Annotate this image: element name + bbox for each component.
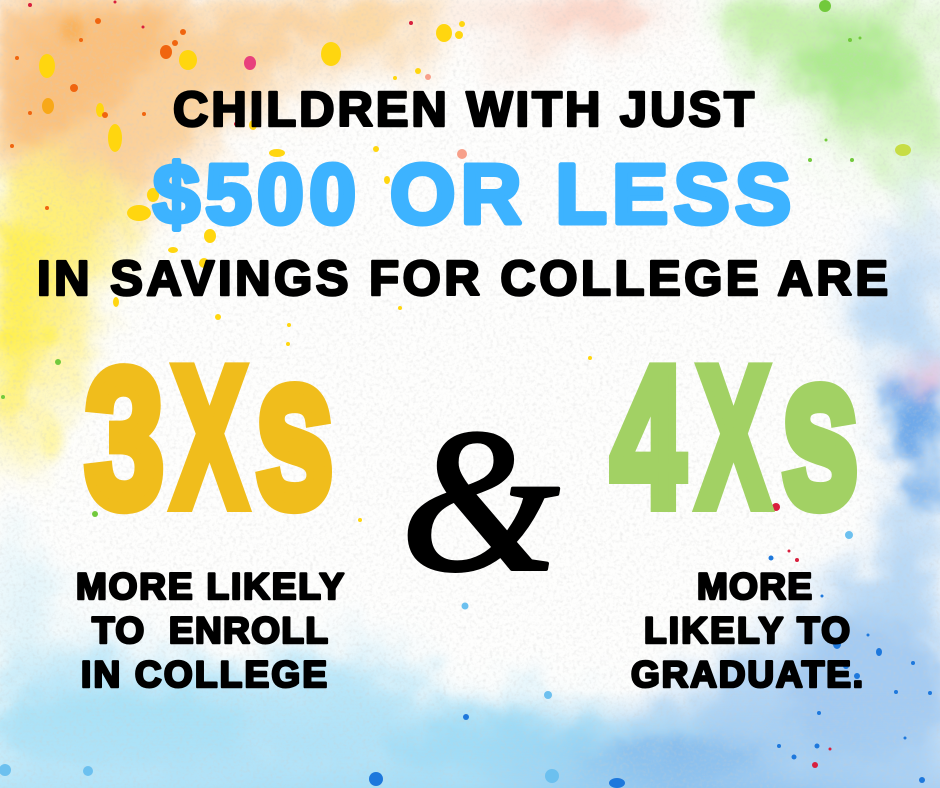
title line: children with just: CHILDREN WITH JUST: [173, 83, 754, 137]
statistic: 3Xs: [85, 306, 334, 553]
statistic: 4Xs: [611, 306, 859, 553]
caption: more likely to enroll in college: [76, 566, 344, 695]
caption: more likely to graduate: GRADUATE.: [631, 654, 863, 695]
title line: in savings for college are: IN SAVINGS FOR COLLEGE ARE: [37, 252, 888, 306]
statistic: 4Xs: X: [697, 326, 770, 549]
caption: more likely to enroll in college: TO ENROLL: [92, 610, 328, 651]
title highlight: $500 or less: $500 OR LESS: [153, 147, 791, 241]
statistic: 3Xs: 3: [85, 329, 164, 548]
caption: more likely to enroll in college: MORE LIKELY: [76, 566, 344, 607]
caption: more likely to graduate: [631, 566, 863, 695]
statistic: 4Xs: s: [781, 306, 859, 553]
caption: more likely to graduate: LIKELY TO: [644, 610, 850, 651]
ampersand: &: [401, 388, 559, 614]
caption: more likely to enroll in college: IN COLLEGE: [81, 654, 327, 695]
statistic: 3Xs: s: [255, 306, 334, 553]
statistic: 3Xs: X: [172, 326, 247, 549]
statistic: 4Xs: 4: [611, 326, 685, 549]
caption: more likely to graduate: MORE: [697, 566, 812, 607]
